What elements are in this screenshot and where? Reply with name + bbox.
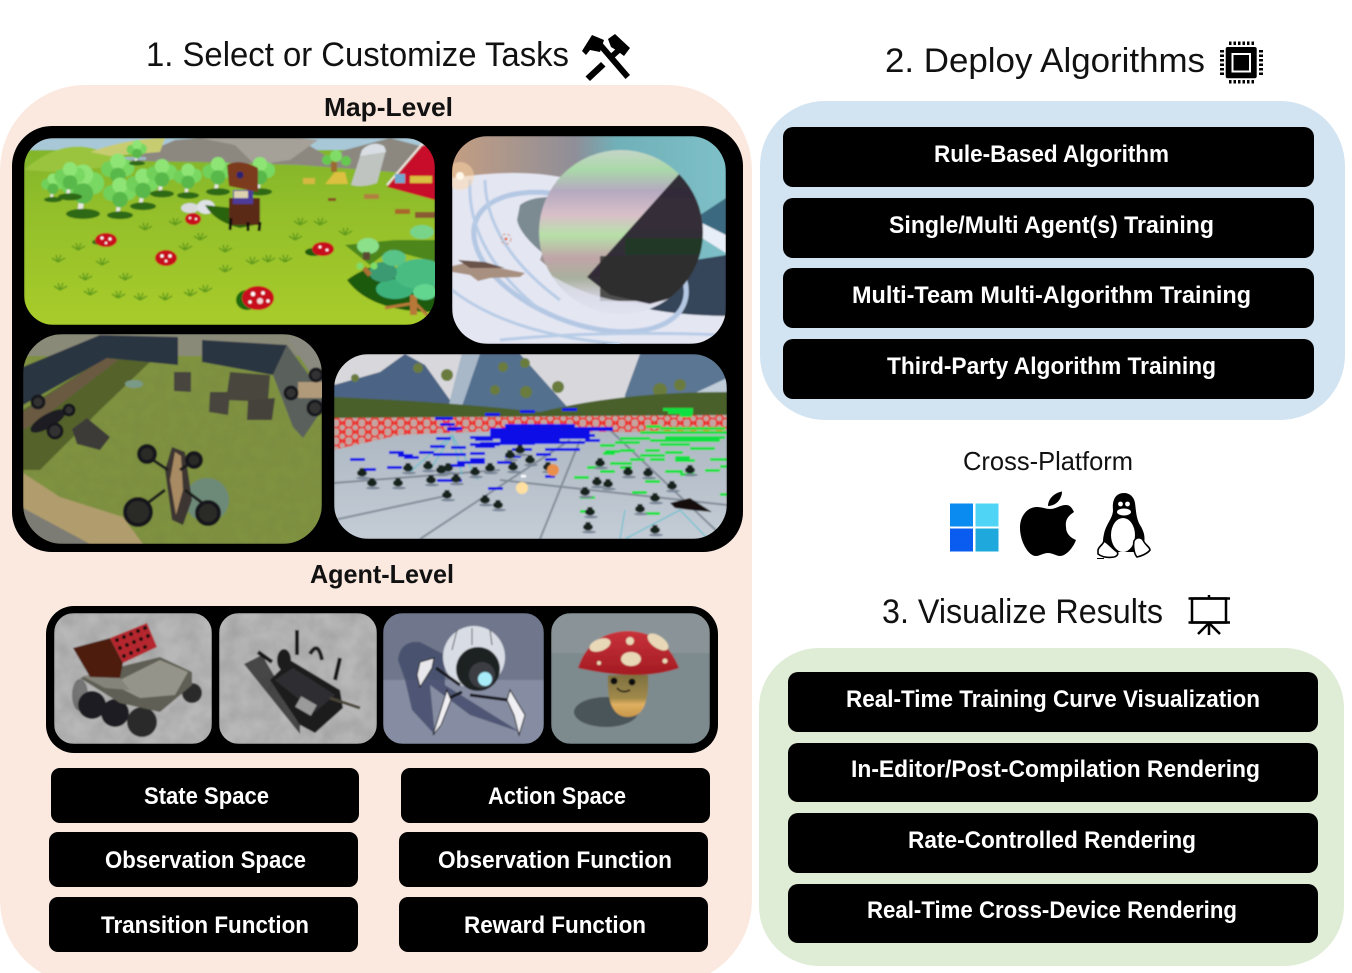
- button: State Space: [51, 768, 359, 823]
- button: Observation Function: Observation Function: [438, 847, 672, 874]
- title: 3. Visualize Results: 3. Visualize Results: [882, 593, 1163, 631]
- button: State Space: State Space: [144, 783, 269, 810]
- thumbnail: smiling mushroom agent: [551, 613, 710, 744]
- panel: visualize results: [759, 648, 1344, 966]
- button: Single/Multi Agent(s) Training: Single/Multi Agent(s) Training: [889, 212, 1214, 239]
- panel: map-level screenshots frame: [12, 126, 743, 552]
- button: Transition Function: [49, 897, 358, 952]
- button: Single/Multi Agent(s) Training: [783, 198, 1314, 258]
- panel: deploy algorithms: [760, 101, 1345, 420]
- icon: Windows logo: [950, 504, 998, 552]
- screenshot: drones over walled grass arena: [23, 334, 324, 544]
- button: Reward Function: [399, 897, 708, 952]
- heading: Map-Level: Map-Level: [324, 92, 453, 122]
- label: Cross-Platform: Cross-Platform: [963, 446, 1133, 476]
- screenshot: large-scale team battle with health bars: [334, 354, 727, 539]
- button: In-Editor/Post-Compilation Rendering: In-Editor/Post-Compilation Rendering: [851, 756, 1260, 783]
- title: 1. Select or Customize Tasks: 1. Select or Customize Tasks: [146, 36, 569, 74]
- icon: crossed hammers: [582, 34, 630, 81]
- button: In-Editor/Post-Compilation Rendering: [788, 743, 1318, 802]
- screenshot: cartoon farm map with mushrooms: [24, 138, 446, 325]
- title: 2. Deploy Algorithms: 2. Deploy Algorithms: [885, 42, 1205, 80]
- button: Third-Party Algorithm Training: Third-Party Algorithm Training: [887, 353, 1216, 380]
- icon: processor chip: [1220, 42, 1263, 84]
- panel: select or customize tasks background: [0, 85, 752, 973]
- thumbnail: spherical walker robot: [383, 613, 544, 744]
- button: Third-Party Algorithm Training: [783, 339, 1314, 399]
- heading: Agent-Level: Agent-Level: [310, 559, 454, 589]
- button: Observation Space: Observation Space: [105, 847, 306, 874]
- button: Rate-Controlled Rendering: Rate-Controlled Rendering: [908, 827, 1196, 854]
- button: Transition Function: Transition Function: [101, 912, 309, 939]
- button: Observation Function: [399, 832, 708, 887]
- button: Rule-Based Algorithm: [783, 127, 1314, 187]
- button: Multi-Team Multi-Algorithm Training: Multi-Team Multi-Algorithm Training: [852, 282, 1251, 309]
- button: Rate-Controlled Rendering: [788, 813, 1318, 873]
- button: Action Space: Action Space: [488, 783, 626, 810]
- screenshot: ringed planet space scene: [446, 136, 726, 360]
- button: Real-Time Cross-Device Rendering: Real-Time Cross-Device Rendering: [867, 897, 1237, 924]
- thumbnail: rocket launcher vehicle: [54, 613, 212, 744]
- button: Observation Space: [49, 832, 358, 887]
- button: Real-Time Cross-Device Rendering: [788, 884, 1318, 943]
- panel: agent-level thumbnails frame: [46, 606, 718, 753]
- thumbnail: tracked robot with gun: [219, 613, 377, 744]
- button: Multi-Team Multi-Algorithm Training: [783, 268, 1314, 328]
- button: Real-Time Training Curve Visualization: [788, 672, 1318, 732]
- icon: presentation board: [1188, 595, 1230, 635]
- button: Rule-Based Algorithm: Rule-Based Algorithm: [934, 141, 1169, 168]
- icon: Linux penguin: [1097, 493, 1150, 559]
- button: Real-Time Training Curve Visualization: Real-Time Training Curve Visualization: [846, 686, 1260, 713]
- button: Action Space: [401, 768, 710, 823]
- icon: Apple logo: [1020, 492, 1076, 556]
- button: Reward Function: Reward Function: [464, 912, 646, 939]
